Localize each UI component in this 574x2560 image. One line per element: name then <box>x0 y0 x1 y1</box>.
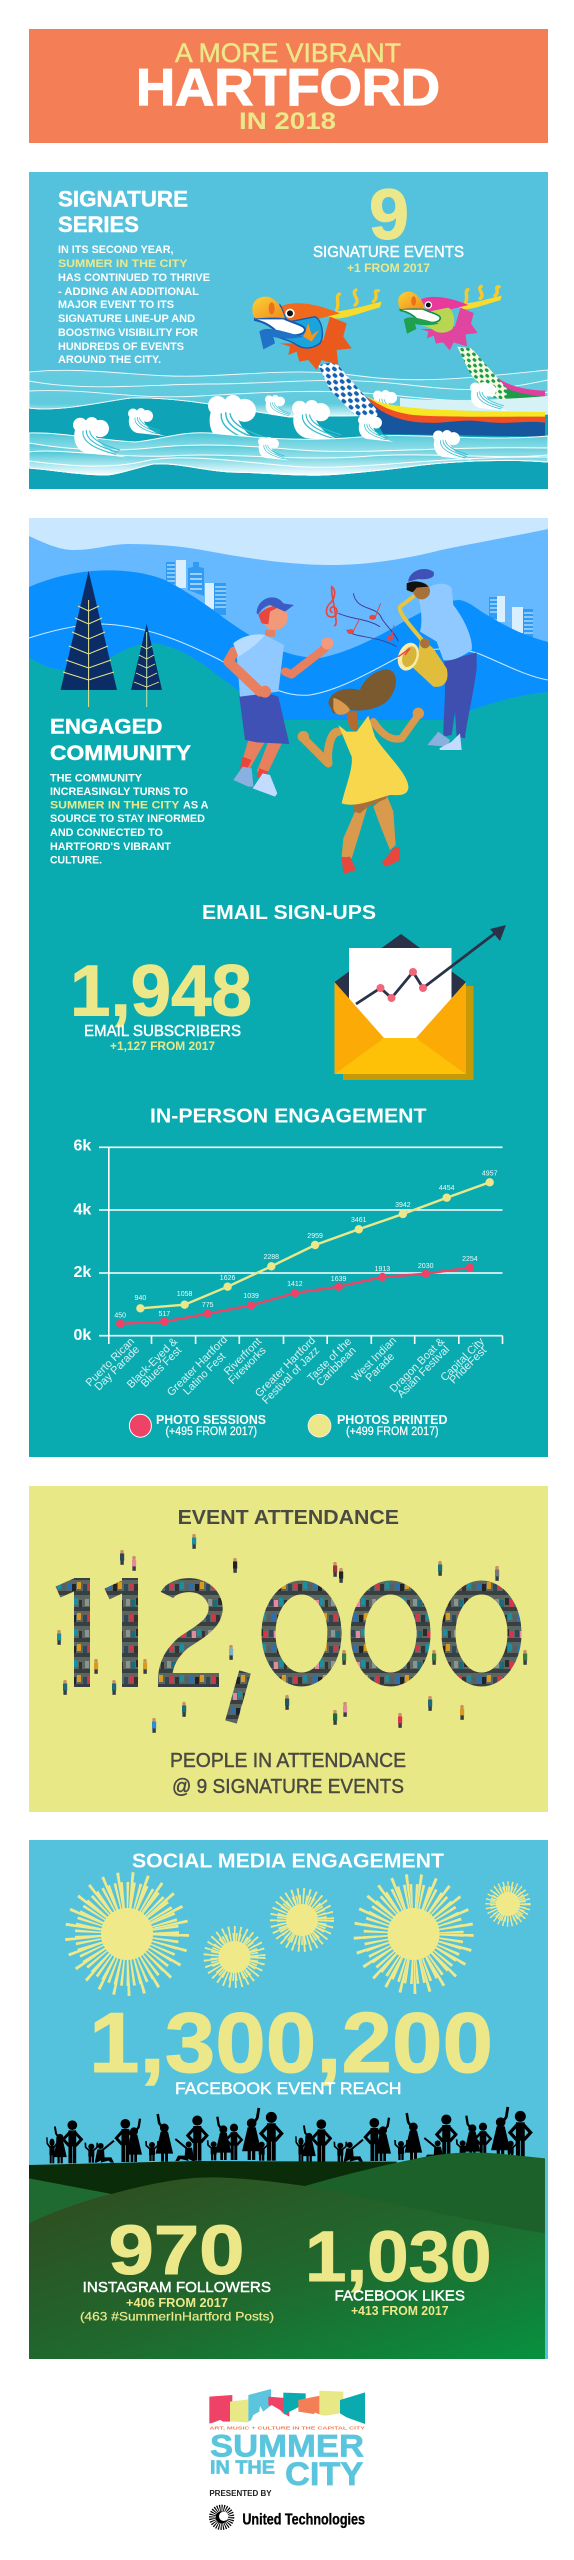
y axis labels: 4k <box>74 1201 91 1218</box>
heading: engaged community: COMMUNITY <box>50 742 191 765</box>
logo skyline blocks <box>209 2389 365 2425</box>
illustration: dancing boy <box>228 597 333 797</box>
stat: instagram followers: +406 FROM 2017 <box>126 2296 228 2310</box>
x axis labels: Taste of the <box>305 1336 354 1384</box>
stat: email subscribers: 1,948 <box>70 952 252 1032</box>
heading: event attendance: EVENT ATTENDANCE <box>178 1507 399 1529</box>
illustration: saxophone player <box>394 569 477 750</box>
panel: event attendance <box>29 1486 548 1812</box>
illustration: firework 5 <box>497 1893 519 1915</box>
text: community description: AS A <box>183 800 209 812</box>
stat: email subscribers: EMAIL SUBSCRIBERS <box>84 1023 241 1040</box>
sponsor name: United Technologies <box>242 2511 365 2528</box>
series: photos printed <box>136 1178 494 1313</box>
x axis labels: Riverfront <box>222 1336 264 1378</box>
icon: large tree <box>61 571 117 707</box>
panel: engaged community <box>29 518 548 1457</box>
text: signature series description: BOOSTING VISIBILITY FOR <box>58 327 198 339</box>
x axis labels: Caribbean <box>314 1345 359 1389</box>
x axis labels: Festival of Jazz <box>260 1345 322 1407</box>
illustration: foreground waves and curls <box>208 382 548 439</box>
stat: instagram followers: (463 #SummerInHartford Posts) <box>80 2310 274 2324</box>
legend: photos printed <box>308 1412 448 1438</box>
x axis labels: Puerto Rican <box>84 1336 137 1389</box>
data labels <box>114 1170 498 1320</box>
text: people in attendance: @ 9 SIGNATURE EVENTS <box>172 1776 404 1798</box>
text: community description: AND CONNECTED TO <box>50 827 163 839</box>
x axis labels: Blues Fest <box>139 1345 184 1390</box>
legend: photos printed: (+499 FROM 2017) <box>346 1426 439 1438</box>
data labels: 1039 <box>243 1293 259 1300</box>
panel: signature series <box>29 172 548 489</box>
x axis labels: Greater Hartford <box>165 1334 230 1399</box>
logo tagline: ART, MUSIC + CULTURE IN THE CAPITAL CITY <box>209 2426 365 2431</box>
text: community description: INCREASINGLY TURNS TO <box>50 786 188 798</box>
heading: in-person engagement: IN-PERSON ENGAGEMENT <box>150 1105 427 1128</box>
illustration: firework 4 <box>384 1904 444 1964</box>
scattered people <box>57 1534 527 1733</box>
stat: 9 signature events: +1 FROM 2017 <box>347 261 430 275</box>
data labels: 4957 <box>482 1170 498 1178</box>
text: signature series description: AROUND THE CITY. <box>58 354 161 366</box>
text: people in attendance: PEOPLE IN ATTENDANCE <box>170 1750 406 1772</box>
heading: signature series <box>58 190 188 232</box>
illustration: right skyline <box>489 596 533 639</box>
text: signature series description: HUNDREDS OF EVENTS <box>58 341 184 353</box>
text: community description: HARTFORD'S VIBRANT <box>50 841 171 853</box>
heading: social media engagement: SOCIAL MEDIA ENGAGEMENT <box>132 1851 444 1873</box>
stat: facebook event reach: 1,300,200 <box>89 1996 493 2091</box>
illustration: firework 2 <box>219 1942 250 1972</box>
data labels: 1412 <box>287 1281 303 1288</box>
stat: instagram followers: INSTAGRAM FOLLOWERS <box>83 2279 271 2296</box>
illustration: firework 3 <box>286 1904 318 1936</box>
title line: a more vibrant: A MORE VIBRANT <box>175 38 401 68</box>
data labels: 775 <box>202 1302 214 1309</box>
header panel <box>29 29 548 143</box>
legend: photo sessions: PHOTO SESSIONS <box>156 1412 266 1427</box>
x axis labels: Fireworks <box>226 1344 269 1387</box>
x axis labels: Capital City <box>438 1335 487 1384</box>
title: Hartford: HARTFORD <box>136 59 440 117</box>
data labels: 1639 <box>331 1276 346 1283</box>
legend: photo sessions <box>129 1412 266 1438</box>
illustration: far dragon boat <box>398 286 545 405</box>
heading: signature series: SIGNATURE <box>58 186 188 212</box>
stat: 9 signature events <box>313 188 464 272</box>
stat: facebook likes: +413 FROM 2017 <box>351 2304 449 2318</box>
text: community description: THE COMMUNITY <box>50 772 143 784</box>
logo: summer in the city, presented by united technologies <box>209 2389 365 2528</box>
text: signature series description: MAJOR EVENT TO ITS <box>58 299 174 311</box>
text: signature series description: SIGNATURE LINE-UP AND <box>58 313 195 325</box>
icon: small tree <box>131 624 162 707</box>
text: signature series description: SUMMER IN THE CITY <box>58 258 188 270</box>
text: community description: SOURCE TO STAY INFORMED <box>50 813 205 825</box>
stat: facebook likes: FACEBOOK LIKES <box>334 2288 465 2304</box>
stat: email subscribers: +1,127 FROM 2017 <box>110 1039 215 1053</box>
data labels: 940 <box>135 1295 146 1302</box>
data labels: 3461 <box>351 1217 367 1224</box>
icon: envelope with rising chart <box>334 925 506 1080</box>
illustration: crowd silhouettes and hills <box>29 2107 545 2359</box>
data labels: 2959 <box>307 1233 323 1240</box>
data labels: 3942 <box>395 1202 411 1209</box>
icon: united technologies mark <box>213 2508 231 2526</box>
text: community description: SUMMER IN THE CITY <box>50 800 180 812</box>
illustration: sky and hills <box>29 518 548 720</box>
data labels: 1913 <box>375 1266 390 1273</box>
stat: 9 signature events: 9 <box>369 176 409 255</box>
stat: 9 signature events: SIGNATURE EVENTS <box>313 244 464 261</box>
data labels: 1626 <box>220 1275 235 1282</box>
illustration: front curls <box>73 408 474 461</box>
logo wordmark: IN THE <box>210 2456 275 2477</box>
data labels: 1058 <box>177 1291 192 1298</box>
x axis labels: PrideFest <box>447 1345 489 1386</box>
logo presented by: PRESENTED BY <box>209 2489 272 2498</box>
illustration: firework 1 <box>96 1903 158 1965</box>
illustration: near dragon boat <box>252 290 545 437</box>
x axis labels: West Indian <box>350 1335 399 1384</box>
series: photo sessions <box>116 1264 474 1328</box>
illustration: dancing woman <box>298 669 424 874</box>
illustration: lower waves <box>29 433 548 475</box>
y axis labels: 6k <box>74 1138 91 1155</box>
x axis labels: Parade <box>364 1351 397 1384</box>
text: signature series description <box>58 244 210 366</box>
x axis labels: Black-Eyed & <box>125 1335 181 1391</box>
x axis labels: Latino Fest <box>181 1351 228 1398</box>
illustration: music notes <box>326 587 398 647</box>
title line: in 2018: IN 2018 <box>239 108 336 135</box>
x axis labels: Asian Festival <box>395 1344 452 1401</box>
logo wordmark <box>210 2428 364 2492</box>
heading: email sign-ups: EMAIL SIGN-UPS <box>202 902 376 924</box>
y axis labels: 2k <box>74 1264 91 1281</box>
stat: facebook event reach: FACEBOOK EVENT REACH <box>175 2080 402 2098</box>
legend: photo sessions: (+495 FROM 2017) <box>166 1426 257 1438</box>
x axis labels <box>84 1334 489 1407</box>
illustration: left skyline <box>166 560 226 615</box>
text: people in attendance <box>170 1750 406 1798</box>
crowd number: 112,000 formed by people <box>58 1578 514 1722</box>
panel: social media engagement <box>29 1840 548 2359</box>
line chart: in-person engagement <box>74 1138 502 1407</box>
text: signature series description: IN ITS SECOND YEAR, <box>58 244 174 256</box>
text: signature series description: - ADDING AN ADDITIONAL <box>58 286 199 298</box>
heading: engaged community: ENGAGED <box>50 716 162 738</box>
text: community description <box>50 772 209 867</box>
stat: instagram followers: 970 <box>108 2211 244 2289</box>
legend: photos printed: PHOTOS PRINTED <box>337 1412 448 1427</box>
data labels: 450 <box>114 1312 126 1320</box>
x axis labels: Day Parade <box>93 1344 142 1393</box>
logo wordmark: CITY <box>285 2456 364 2492</box>
stat: facebook likes: 1,030 <box>305 2218 492 2297</box>
stat: email subscribers <box>74 964 250 1052</box>
data labels: 4454 <box>439 1185 455 1192</box>
x axis labels: Greater Hartford <box>253 1335 318 1400</box>
illustration: upper waves <box>29 370 548 489</box>
text: signature series description: HAS CONTINUED TO THRIVE <box>58 272 210 284</box>
data labels: 517 <box>158 1311 170 1318</box>
data labels: 2254 <box>462 1256 478 1263</box>
data labels: 2030 <box>418 1263 434 1270</box>
heading: engaged community <box>50 718 191 760</box>
x axis labels: Dragon Boat & <box>388 1335 448 1395</box>
y axis labels <box>74 1138 91 1344</box>
data labels: 2288 <box>264 1254 279 1261</box>
logo wordmark: SUMMER <box>210 2428 364 2464</box>
y axis labels: 0k <box>74 1327 91 1344</box>
text: community description: CULTURE. <box>50 855 102 867</box>
heading: signature series: SERIES <box>58 212 139 237</box>
stat: instagram followers <box>80 2211 274 2324</box>
